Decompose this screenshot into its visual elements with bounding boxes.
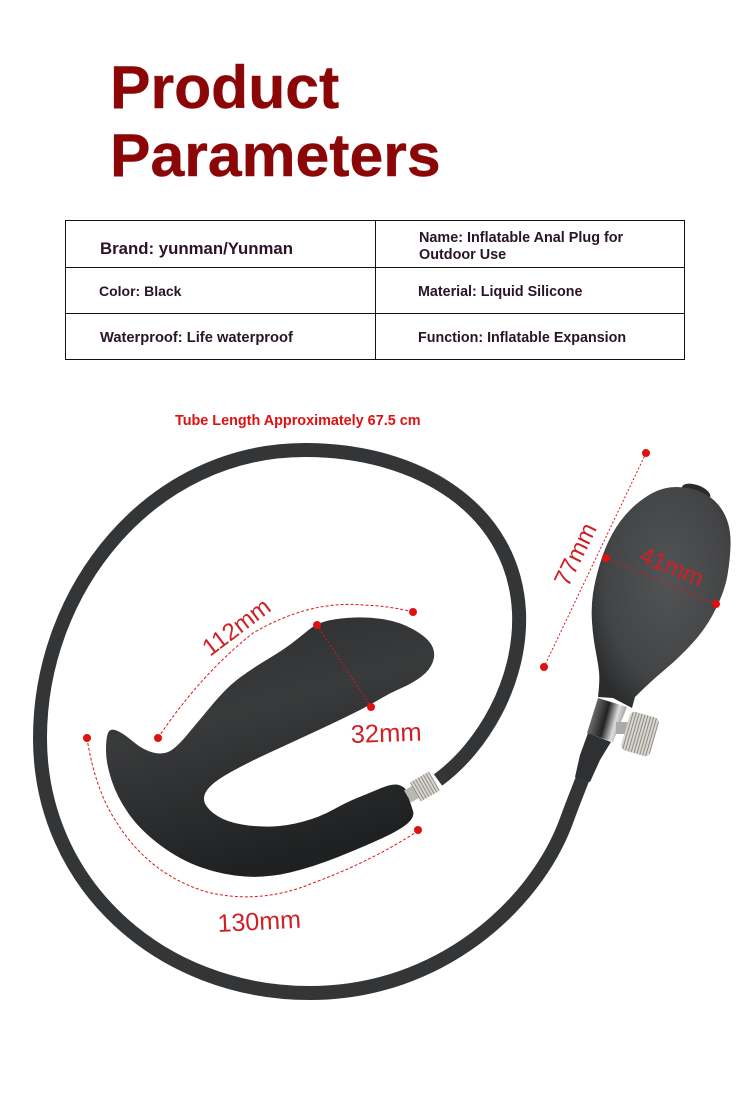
dimension: 112mm: 112mm	[197, 593, 276, 662]
pump collar	[575, 733, 611, 782]
title: Parameters	[110, 121, 441, 189]
cell: color: Color: Black	[99, 283, 181, 299]
cell: waterproof: Waterproof: Life waterproof	[100, 330, 293, 346]
tube	[40, 450, 596, 993]
cell: name: Name: Inflatable Anal Plug for	[419, 230, 623, 246]
cell: name: Outdoor Use	[419, 247, 506, 263]
cell: material: Material: Liquid Silicone	[418, 284, 582, 300]
title: Product	[110, 53, 339, 121]
pump bulb	[592, 480, 731, 708]
connector	[402, 771, 440, 806]
cell: name	[419, 230, 623, 263]
tube length label: Tube Length Approximately 67.5 cm	[175, 413, 420, 429]
parameters table	[65, 220, 685, 360]
plug body	[106, 617, 434, 877]
pump valve	[587, 698, 660, 757]
dimension: 77mm: 77mm	[549, 519, 603, 591]
dimension: 41mm: 41mm	[636, 542, 708, 593]
dimension: 41mm	[602, 542, 720, 608]
dimension: 112mm	[154, 593, 417, 742]
dimension: 32mm	[313, 621, 422, 749]
dimension: 130mm	[83, 734, 422, 938]
dimension: 77mm	[540, 449, 650, 671]
title	[110, 53, 441, 189]
dimension: 32mm: 32mm	[350, 719, 422, 749]
cell: function: Function: Inflatable Expansion	[418, 330, 626, 346]
dimension: 130mm: 130mm	[217, 906, 302, 938]
cell: brand: Brand: yunman/Yunman	[100, 239, 293, 258]
